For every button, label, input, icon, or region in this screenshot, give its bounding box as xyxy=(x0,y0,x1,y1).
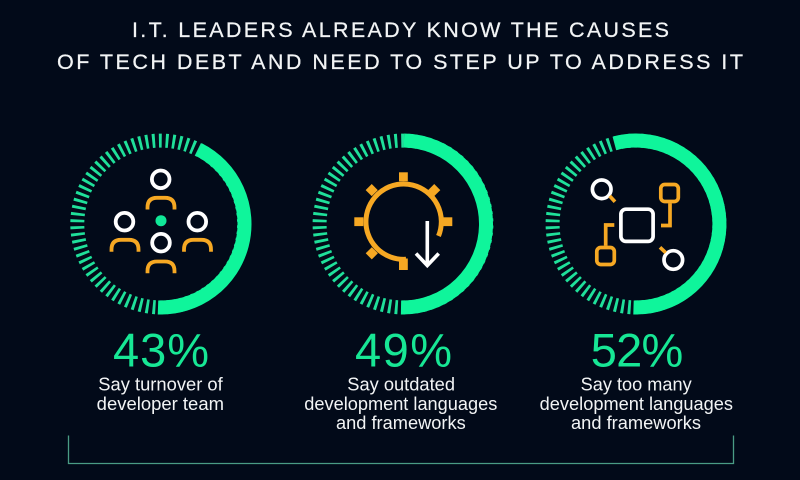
icon: gear with down arrow xyxy=(354,172,452,270)
icon: team of people xyxy=(112,170,211,273)
ring gauge: 52% xyxy=(551,139,721,309)
description: Say outdated xyxy=(347,374,455,394)
description: development languages xyxy=(540,394,733,414)
title: OF TECH DEBT AND NEED TO STEP UP TO ADDRESS IT xyxy=(57,50,743,74)
description xyxy=(97,374,224,414)
panel: outdated languages xyxy=(304,139,497,433)
description: developer team xyxy=(97,394,224,414)
title: I.T. LEADERS ALREADY KNOW THE CAUSES xyxy=(132,18,669,42)
stat: 43%: 43% xyxy=(113,324,209,376)
bracket line xyxy=(68,436,734,464)
description xyxy=(540,374,733,433)
description xyxy=(304,374,497,433)
panel: developer turnover xyxy=(76,139,246,414)
description: and frameworks xyxy=(336,413,466,433)
description: Say too many xyxy=(581,374,692,394)
icon: connected nodes xyxy=(592,180,683,269)
ring gauge: 43% xyxy=(76,139,246,309)
description: and frameworks xyxy=(571,413,701,433)
title xyxy=(57,18,743,74)
panel: too many languages xyxy=(540,139,733,433)
description: development languages xyxy=(304,394,497,414)
description: Say turnover of xyxy=(98,374,224,394)
ring gauge: 49% xyxy=(318,139,488,309)
stat: 52%: 52% xyxy=(591,324,683,376)
stat: 49%: 49% xyxy=(355,324,452,376)
